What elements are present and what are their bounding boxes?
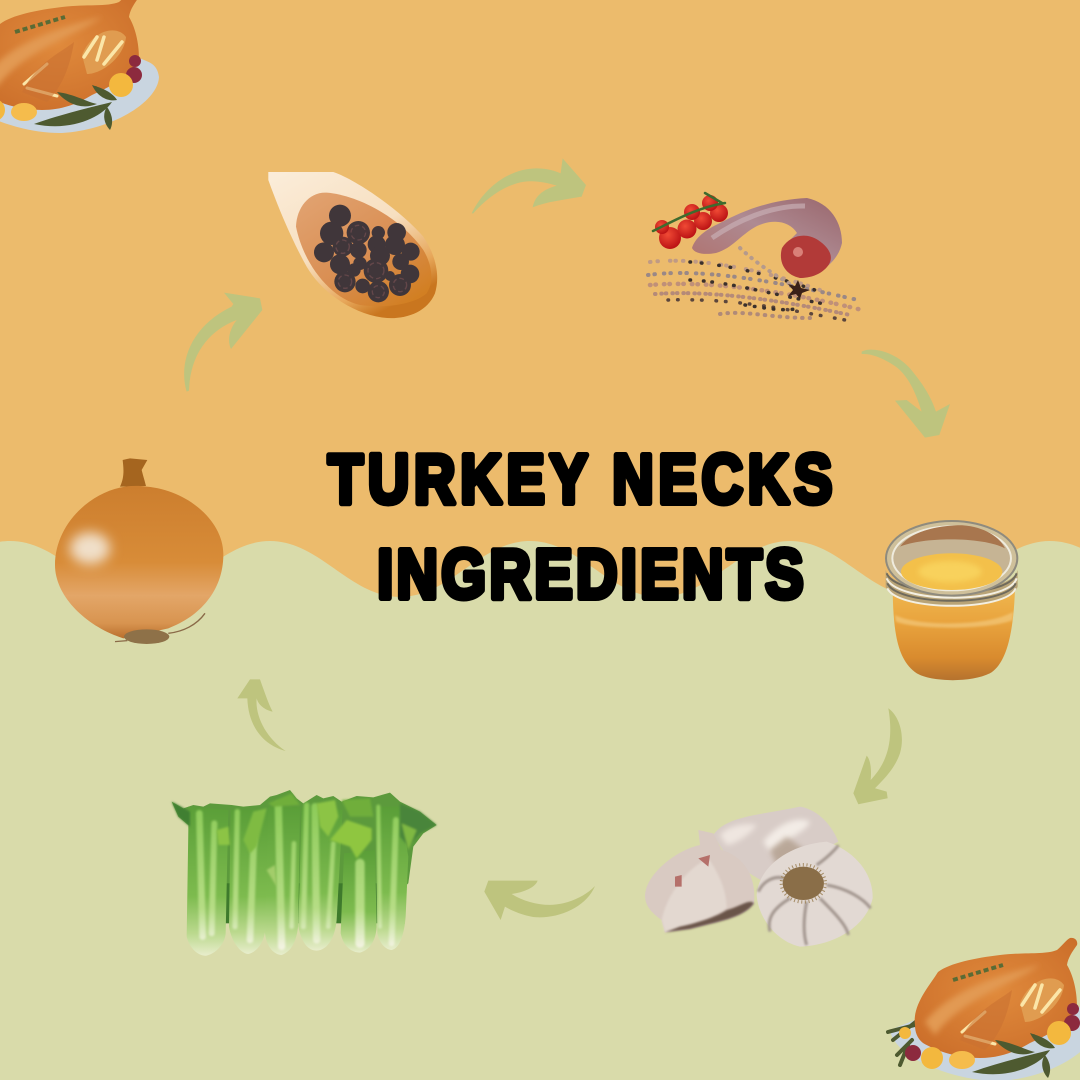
- arrow: garlic to celery: [484, 881, 595, 920]
- leaf clusters: [172, 793, 437, 887]
- tomatoes: [659, 227, 681, 249]
- spices scatter: [648, 248, 862, 320]
- icon: turkey neck with tomatoes and spices: [648, 193, 862, 320]
- arrow: onion to pepper: [184, 293, 262, 392]
- arrow: celery to onion: [237, 679, 286, 751]
- arrow: pepper to neck: [472, 158, 586, 213]
- ribs: [199, 805, 396, 947]
- icon: roast turkey bottom-right: [888, 938, 1080, 1080]
- icon: onion: [55, 458, 223, 644]
- icon: roast turkey top-left: [0, 0, 159, 133]
- arrow: jar to garlic: [853, 708, 902, 804]
- title: [328, 440, 832, 613]
- star anise: [788, 280, 810, 299]
- neck: [692, 198, 842, 278]
- icon: garlic bulbs: [645, 807, 873, 947]
- leaves backing: [172, 790, 437, 887]
- icon: jar of broth: [886, 521, 1018, 680]
- title: INGREDIENTS: [377, 535, 804, 613]
- stalks: [187, 807, 228, 956]
- icon: celery stalks: [172, 790, 437, 956]
- arrow: neck to jar: [862, 350, 950, 438]
- background: green wave bottom: [0, 541, 1080, 1080]
- icon: peppercorns on wooden spoon: [268, 172, 437, 318]
- title: TURKEY NECKS: [328, 440, 832, 518]
